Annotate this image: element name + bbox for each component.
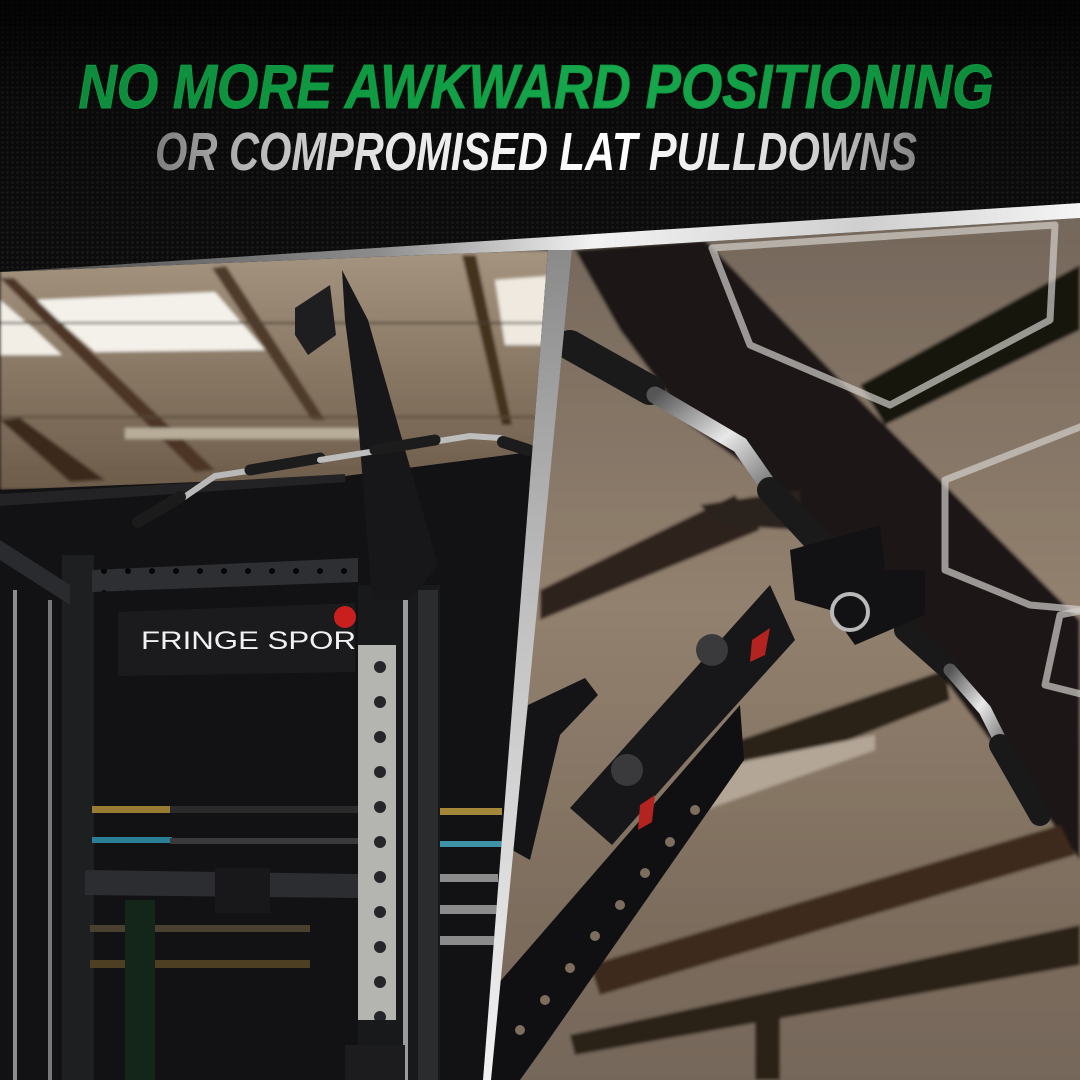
translucent hexagons (712, 225, 1080, 695)
barbell rack (90, 806, 502, 968)
black back wall (0, 452, 550, 1080)
silver divider (483, 250, 572, 1080)
pulley arm (512, 678, 598, 860)
logo plate (118, 603, 356, 676)
upper crossmember (92, 558, 358, 592)
top silver strip (0, 203, 1080, 272)
panel: textured dark header background (0, 0, 1080, 280)
lower crossmember (85, 870, 358, 898)
cage top crossbar (0, 474, 345, 506)
ceiling (0, 250, 560, 490)
bracket mount (790, 525, 925, 645)
left upright rails (0, 540, 94, 1080)
lat bar (138, 436, 528, 522)
panel: left gym photo (0, 250, 560, 1080)
panel: right lat bar photo (480, 210, 1080, 1080)
pulldown arm (570, 585, 795, 845)
angled arm plate (342, 270, 410, 600)
lower perforated rail (490, 705, 744, 1080)
logo plate: FRINGE SPOR (141, 627, 356, 655)
tower upright (345, 585, 440, 1080)
ceiling and beams (480, 210, 1080, 1080)
lat bar (570, 345, 1040, 815)
